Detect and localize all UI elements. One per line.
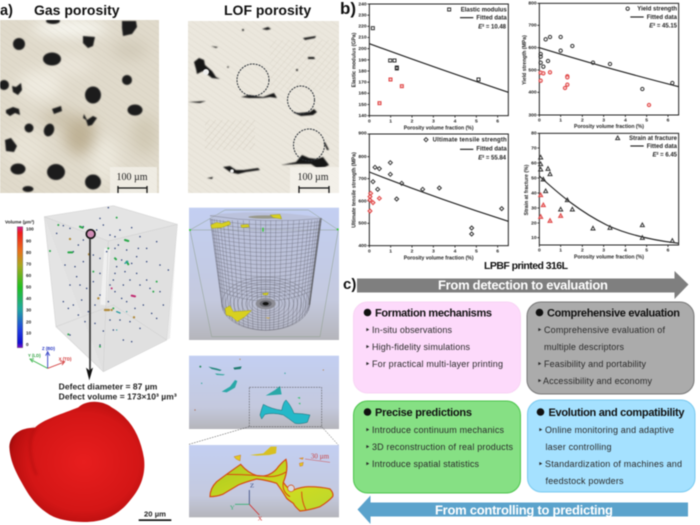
- chart: ultimate tensile strength: 3: [432, 248, 435, 254]
- colour bar legend: 20: [26, 319, 32, 324]
- chart: ultimate tensile strength: [352, 131, 508, 261]
- chart: yield strength: Yield strength: [637, 7, 677, 13]
- chart: yield strength: 4: [624, 118, 627, 124]
- label c): c): [343, 276, 356, 293]
- scale bar: 100 µm: 100 µm: [116, 172, 148, 183]
- chart: strain at fracture: 1: [559, 248, 562, 254]
- scale bar: 100 µm: [290, 167, 339, 193]
- colour bar legend: 50: [26, 284, 32, 289]
- panel: formation mechanisms: ‣: [365, 325, 370, 335]
- chart: elastic modulus: 240: [358, 1, 367, 7]
- chart: elastic modulus: 0: [368, 118, 371, 124]
- chart: yield strength: Porosity volume fraction (%): [574, 124, 644, 130]
- panel: formation mechanisms: ‣: [365, 359, 370, 369]
- enlarged red defect: [9, 402, 144, 522]
- colour bar legend: [5, 219, 35, 348]
- yellow defects: [211, 214, 282, 322]
- chart: strain at fracture: Strain at fracture (%): [524, 164, 530, 215]
- chart: strain at fracture: 6: [667, 248, 670, 254]
- coordinate axes: [28, 346, 72, 368]
- micrograph: gas porosity: [0, 18, 159, 193]
- chart: ultimate tensile strength: 900: [358, 131, 367, 137]
- chart: ultimate tensile strength: 4: [454, 248, 457, 254]
- chart: elastic modulus: 1: [389, 118, 392, 124]
- chart: strain at fracture: 5: [645, 248, 648, 254]
- chart: strain at fracture: Porosity volume fraction (%): [574, 254, 644, 260]
- xyz axes: Z: [250, 483, 254, 490]
- chart: elastic modulus: 5: [475, 118, 478, 124]
- chart: elastic modulus: 230: [358, 12, 367, 18]
- panel: comprehensive evaluation: Accessibility and economy: [543, 376, 652, 386]
- panel: comprehensive evaluation: ‣: [537, 376, 542, 386]
- chart: ultimate tensile strength: Ultimate tensile strength: [433, 138, 507, 144]
- chart: ultimate tensile strength: Fitted data: [476, 147, 507, 153]
- panel: comprehensive evaluation: ‣: [537, 359, 542, 369]
- chart: elastic modulus: 3: [432, 118, 435, 124]
- chart: ultimate tensile strength: 5: [475, 248, 478, 254]
- colour bar legend: 30: [26, 308, 32, 313]
- chart: strain at fracture: Fitted data: [647, 144, 678, 150]
- panel: comprehensive evaluation: Comprehensive evaluation: [547, 308, 680, 320]
- panel: precise predictions: Precise predictions: [375, 407, 472, 419]
- chart: elastic modulus: [352, 1, 508, 131]
- chart: elastic modulus: Porosity volume fraction (%): [404, 125, 474, 131]
- panel: precise predictions: ‣: [365, 442, 370, 452]
- defect measurements: Defect volume = 173×10³ µm³: [59, 392, 177, 402]
- CT panel: cyan defects: [189, 356, 339, 445]
- panel: precise predictions: [354, 401, 520, 493]
- scale bar: 20 µm: 20 µm: [144, 510, 166, 519]
- panel: formation mechanisms: High-fidelity simulations: [372, 342, 470, 352]
- chart: yield strength: 5: [645, 118, 648, 124]
- panel: formation mechanisms: For practical multi-layer printing: [372, 359, 503, 369]
- chart: elastic modulus: 170: [358, 80, 367, 86]
- chart: elastic modulus: 160: [358, 91, 367, 97]
- panel: gas porosity CT volume and defect: [5, 206, 339, 522]
- chart: strain at fracture: 3: [602, 248, 605, 254]
- panel: comprehensive evaluation: Feasibility and portability: [544, 359, 646, 369]
- colour bar legend: 90: [26, 238, 32, 243]
- chart: yield strength: 300: [528, 112, 537, 118]
- chart: strain at fracture: 10: [531, 235, 537, 241]
- chart: elastic modulus: 200: [358, 46, 367, 52]
- chart: strain at fracture: 2: [581, 248, 584, 254]
- panel: evolution and compatibility: ‣: [538, 459, 543, 469]
- chart: ultimate tensile strength: 700: [358, 176, 367, 182]
- chart: strain at fracture: 4: [624, 248, 627, 254]
- chart: yield strength: 1: [559, 118, 562, 124]
- chart: ultimate tensile strength: 0: [368, 248, 371, 254]
- panel: comprehensive evaluation: [527, 302, 694, 394]
- 30 µm annotation: 30 µm: [311, 453, 330, 461]
- defect measurements: Defect diameter = 87 µm: [59, 381, 158, 391]
- chart: ultimate tensile strength: 800: [358, 154, 367, 160]
- colour bar legend: 0: [26, 342, 29, 347]
- label a): a): [0, 3, 13, 19]
- scale bar: 20 µm: [139, 510, 171, 521]
- colour bar legend: 70: [26, 261, 32, 266]
- chart: elastic modulus: 210: [358, 35, 367, 41]
- coordinate axes: X (TD): [59, 356, 72, 361]
- arrow: from controlling to predicting: [358, 496, 688, 524]
- chart: strain at fracture: 70: [531, 145, 537, 151]
- chart: elastic modulus: Fitted data: [476, 15, 507, 21]
- panel: precise predictions: 3D reconstruction of real products: [372, 442, 514, 452]
- chart: yield strength: 2: [581, 118, 584, 124]
- panel: precise predictions: ‣: [365, 459, 370, 469]
- chart: elastic modulus: 190: [358, 57, 367, 63]
- chart: strain at fracture: 50: [531, 175, 537, 181]
- chart: strain at fracture: E² = 6.45: [653, 151, 678, 158]
- chart: ultimate tensile strength: 2: [411, 248, 414, 254]
- dashed circles: [237, 64, 324, 161]
- arrow: from detection to evaluation: From detection to evaluation: [438, 278, 608, 292]
- panel: formation mechanisms: In-situ observations: [372, 325, 452, 335]
- chart: ultimate tensile strength: E² = 55.84: [478, 155, 507, 162]
- chart: elastic modulus: E² = 10.48: [478, 23, 507, 30]
- chart: elastic modulus: 150: [358, 102, 367, 108]
- colour bar legend: 40: [26, 296, 32, 301]
- chart: strain at fracture: Strain at fracture: [629, 136, 678, 142]
- heading: Gas porosity: Gas porosity: [34, 2, 120, 18]
- panel: comprehensive evaluation: Comprehensive evaluation of: [544, 325, 665, 335]
- chart: strain at fracture: 80: [531, 131, 537, 137]
- heading: LOF porosity: LOF porosity: [224, 2, 311, 18]
- arrow: from controlling to predicting: From controlling to predicting: [435, 502, 613, 518]
- arrow: highlighted pore to enlarged defect: [86, 230, 95, 380]
- chart: elastic modulus: 220: [358, 24, 367, 30]
- chart: ultimate tensile strength: 1: [389, 248, 392, 254]
- scale bar: 100 µm: 100 µm: [297, 172, 329, 183]
- panel: evolution and compatibility: [528, 400, 695, 492]
- chart: strain at fracture: 0: [538, 248, 541, 254]
- chart: yield strength: 800: [528, 1, 537, 7]
- micrograph: LOF porosity: [188, 21, 339, 193]
- chart: ultimate tensile strength: 400: [358, 243, 367, 249]
- chart: yield strength: 3: [602, 118, 605, 124]
- scale bar: 100 µm: [110, 167, 157, 193]
- arrow: from detection to evaluation: [357, 271, 688, 299]
- chart: yield strength: 600: [528, 45, 537, 51]
- panel: evolution and compatibility: laser controlling: [546, 442, 612, 452]
- dashed zoom box: [189, 387, 338, 445]
- colour bar legend: 100: [26, 227, 34, 232]
- chart: ultimate tensile strength: 500: [358, 221, 367, 227]
- panel: evolution and compatibility: Standardization of machines and: [545, 459, 682, 469]
- chart: ultimate tensile strength: Porosity volume fraction (%): [404, 255, 474, 261]
- CT panel: cylinder mesh: [189, 208, 339, 340]
- chart: elastic modulus: Elastic modulus (GPa): [352, 32, 358, 87]
- chart: strain at fracture: 60: [531, 160, 537, 166]
- chart: elastic modulus: 140: [358, 113, 367, 119]
- chart: ultimate tensile strength: Ultimate tensile strength (MPa): [352, 152, 358, 228]
- chart: elastic modulus: 4: [454, 118, 457, 124]
- colour bar legend: Volume (µm³): [5, 219, 35, 224]
- chart: yield strength: 700: [528, 23, 537, 29]
- 3D pore distribution box: [44, 206, 177, 372]
- defect measurements: [59, 381, 177, 402]
- colour bar legend: 80: [26, 250, 32, 255]
- 30 µm annotation: [305, 453, 330, 462]
- CT panel: enlarged yellow-green defect: [189, 445, 339, 522]
- chart: yield strength: E² = 45.15: [649, 23, 678, 30]
- chart: yield strength: 6: [667, 118, 670, 124]
- chart: strain at fracture: 30: [531, 205, 537, 211]
- panel: formation mechanisms: Formation mechanisms: [375, 308, 492, 320]
- panel: precise predictions: ‣: [365, 425, 370, 435]
- gas pores: [0, 18, 142, 192]
- chart: elastic modulus: 180: [358, 68, 367, 74]
- colour bar legend: 10: [26, 331, 32, 336]
- panel: formation mechanisms: [354, 302, 520, 393]
- chart: yield strength: Fitted data: [647, 15, 678, 21]
- xyz axes: X: [258, 515, 263, 522]
- chart: elastic modulus: 6: [496, 118, 499, 124]
- lack-of-fusion defects: [188, 27, 329, 179]
- chart: elastic modulus: Elastic modulus: [461, 7, 507, 13]
- coordinate axes: Z (BD): [42, 346, 56, 351]
- panel: evolution and compatibility: Online monitoring and adaptive: [545, 425, 674, 435]
- chart: strain at fracture: [524, 131, 679, 260]
- chart: yield strength: [522, 1, 679, 130]
- coordinate axes: Y (LD): [28, 353, 41, 358]
- chart: yield strength: 400: [528, 90, 537, 96]
- chart: strain at fracture: 20: [531, 220, 537, 226]
- colour bar legend: 60: [26, 273, 32, 278]
- chart: ultimate tensile strength: 600: [358, 198, 367, 204]
- chart: strain at fracture: 40: [531, 190, 537, 196]
- chart: yield strength: 500: [528, 67, 537, 73]
- panel: precise predictions: Introduce spatial statistics: [372, 459, 480, 469]
- chart: yield strength: 0: [538, 118, 541, 124]
- panel: evolution and compatibility: feedstock powders: [546, 476, 624, 486]
- chart: elastic modulus: 2: [411, 118, 414, 124]
- chart group title: LPBF printed 316L: [484, 260, 569, 272]
- panel: evolution and compatibility: ‣: [538, 425, 543, 435]
- panel: comprehensive evaluation: ‣: [537, 325, 542, 335]
- panel: formation mechanisms: ‣: [365, 342, 370, 352]
- panel: precise predictions: Introduce continuum mechanics: [372, 425, 504, 435]
- xyz axes: [230, 483, 263, 522]
- panel: comprehensive evaluation: multiple descriptors: [544, 342, 624, 352]
- chart: yield strength: Yield strength (MPa): [522, 35, 528, 85]
- chart: ultimate tensile strength: 6: [496, 248, 499, 254]
- xyz axes: Y: [230, 505, 235, 512]
- panel: evolution and compatibility: Evolution and compatibility: [548, 407, 685, 419]
